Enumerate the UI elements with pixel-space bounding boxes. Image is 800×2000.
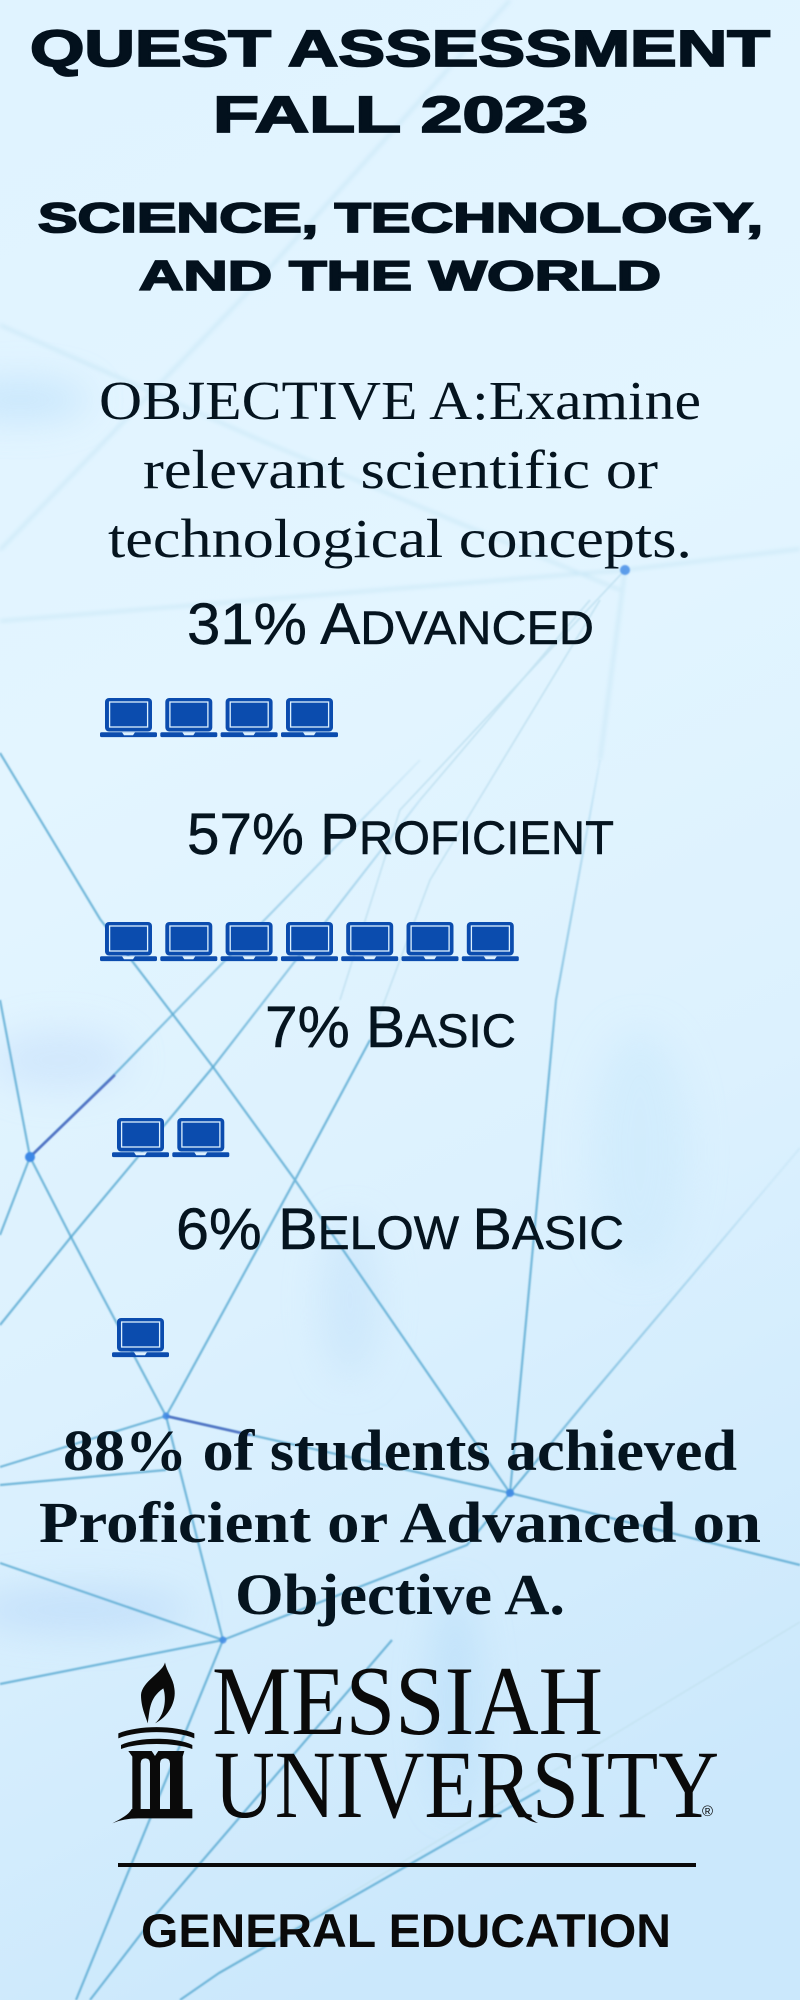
label: 31% advanced: 31% ADVANCED (187, 592, 594, 657)
general education label: GENERAL EDUCATION (141, 1904, 671, 1957)
logo: Messiah University (112, 1647, 719, 1838)
label: 7% basic: 7% BASIC (265, 995, 516, 1060)
label: 57% proficient: 57% PROFICIENT (187, 802, 614, 867)
objective text: relevant scientific or (143, 439, 658, 500)
objective text: OBJECTIVE A:Examine (99, 370, 701, 431)
title (30, 20, 770, 143)
label: 6% below basic: 6% BELOW BASIC (176, 1197, 624, 1262)
wordmark: MESSIAH (212, 1647, 603, 1756)
subtitle (38, 194, 763, 299)
divider line (118, 1863, 696, 1867)
summary statement (39, 1418, 761, 1627)
summary statement: 88% of students achieved (63, 1418, 737, 1483)
icon row: 7 laptops (100, 922, 519, 961)
subtitle: AND THE WORLD (139, 252, 661, 299)
icon: torch pillar (112, 1662, 194, 1823)
title: QUEST ASSESSMENT (30, 20, 770, 77)
icon row: 1 laptop (112, 1318, 169, 1357)
wordmark (212, 1647, 719, 1838)
objective text: technological concepts. (108, 508, 692, 569)
title: FALL 2023 (213, 86, 588, 143)
wordmark: UNIVERSITY (214, 1731, 719, 1838)
icon row: 4 laptops (100, 698, 338, 737)
subtitle: SCIENCE, TECHNOLOGY, (38, 194, 763, 241)
summary statement: Objective A. (235, 1562, 565, 1627)
summary statement: Proficient or Advanced on (39, 1490, 761, 1555)
wordmark: ® (702, 1803, 713, 1820)
icon row: 2 laptops (112, 1118, 229, 1157)
objective text (99, 370, 701, 569)
